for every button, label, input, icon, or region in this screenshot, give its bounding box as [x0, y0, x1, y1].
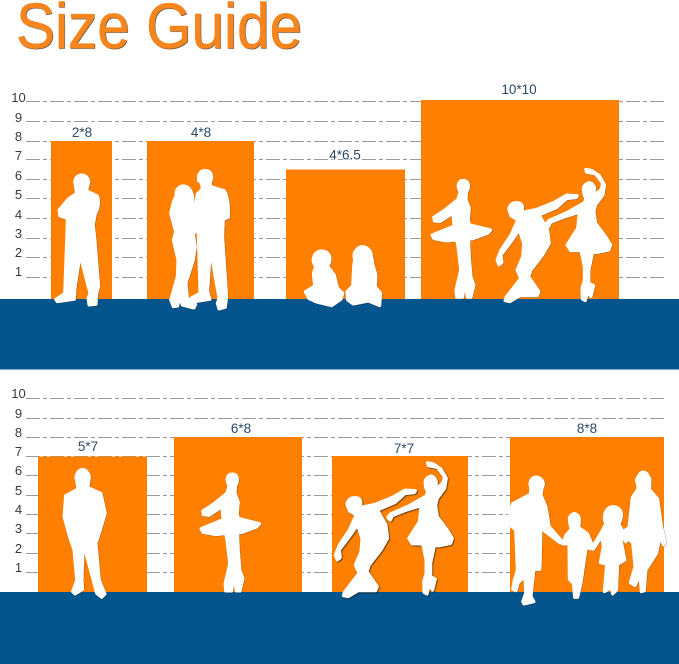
silhouette: couple	[171, 170, 229, 309]
top chart: gridlines and scale: 9	[15, 110, 22, 125]
silhouette: ballerina	[201, 474, 260, 591]
bottom chart: gridlines and scale: 10	[11, 386, 26, 401]
bottom chart: gridlines and scale: 9	[15, 406, 22, 421]
bottom chart: gridlines and scale	[11, 386, 665, 575]
size 4*8 panel: 4*8	[191, 125, 211, 140]
size 4*6.5 panel	[286, 148, 405, 299]
size 5*7 panel	[38, 439, 147, 592]
bottom chart: gridlines and scale: 3	[15, 521, 22, 536]
top chart: gridlines and scale: 5	[15, 187, 22, 202]
silhouette: two dancers	[335, 463, 452, 597]
top chart: gridlines and scale: 1	[15, 264, 22, 279]
top chart: gridlines and scale: 8	[15, 129, 22, 144]
size 10*10 panel	[421, 82, 619, 299]
silhouette: family holding hands	[509, 472, 665, 604]
bottom chart: gridlines and scale: 4	[15, 502, 22, 517]
size 5*7 panel: 5*7	[78, 439, 98, 454]
bottom chart: gridlines and scale: 7	[15, 444, 22, 459]
size 8*8 panel: 8*8	[577, 421, 597, 436]
bottom chart: gridlines and scale: 2	[15, 541, 22, 556]
size 4*8 panel	[147, 125, 254, 299]
silhouette: seated children	[305, 247, 381, 306]
top chart: gridlines and scale: 2	[15, 245, 22, 260]
size 4*6.5 panel: 4*6.5	[329, 148, 361, 162]
size 6*8 panel: 6*8	[231, 421, 251, 436]
bottom chart: gridlines and scale: 8	[15, 425, 22, 440]
top floor band	[0, 299, 679, 370]
size 2*8 panel: 2*8	[72, 125, 92, 140]
top chart: gridlines and scale: 7	[15, 148, 22, 163]
size 8*8 panel	[510, 421, 664, 592]
bottom chart: gridlines and scale: 5	[15, 483, 22, 498]
bottom chart: gridlines and scale: 1	[15, 560, 22, 575]
bottom floor band	[0, 592, 679, 664]
size 7*7 panel	[332, 441, 468, 592]
size 7*7 panel: 7*7	[394, 441, 414, 456]
top chart: gridlines and scale	[11, 90, 665, 279]
size 6*8 panel	[174, 421, 302, 592]
size 10*10 panel: 10*10	[501, 82, 537, 97]
size 2*8 panel	[51, 125, 112, 299]
silhouette: three dancers	[432, 169, 611, 302]
bottom chart: gridlines and scale: 6	[15, 463, 22, 478]
top chart: gridlines and scale: 4	[15, 207, 22, 222]
silhouette: standing man	[64, 469, 105, 597]
top chart: gridlines and scale: 6	[15, 168, 22, 183]
top chart: gridlines and scale: 10	[11, 90, 26, 105]
silhouette: man with crossed arms	[56, 175, 99, 305]
top chart: gridlines and scale: 3	[15, 226, 22, 241]
